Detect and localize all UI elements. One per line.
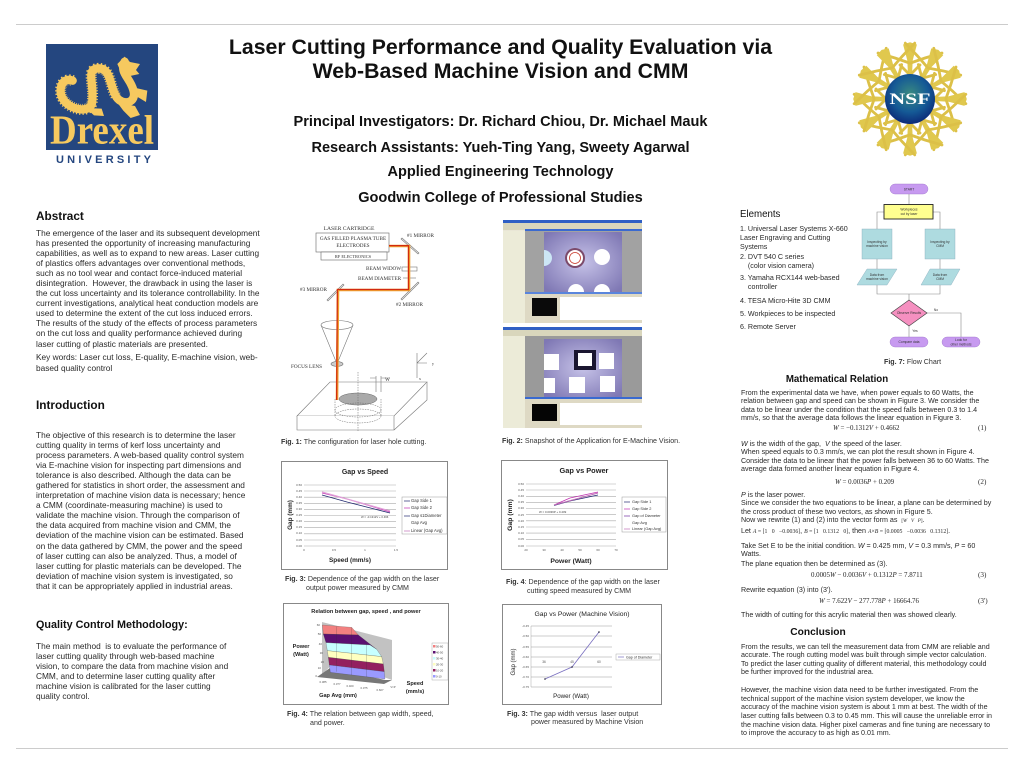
methodology text: CMM, and to determine laser cutting quality after (36, 671, 215, 681)
caption: 3D chart: and power. (310, 719, 345, 727)
math paragraph 1: relation between gap and speed can be shown in Figure 3. We consider the (741, 397, 979, 405)
chart: 3D surface of gap, speed and power: 60 (317, 623, 320, 627)
chart: gap vs power machine vision: -0.55 (522, 645, 529, 649)
chart: gap vs power: 0.20 (518, 519, 524, 523)
caption: 3D chart (287, 710, 434, 727)
math paragraph 4: Watts. (741, 550, 761, 558)
chart: gap vs power: 50 (578, 548, 582, 552)
chart: 3D surface of gap, speed and power (283, 603, 449, 705)
chart: 3D surface of gap, speed and power: 10-20 (436, 668, 444, 672)
chart: gap vs power machine vision: -0.50 (522, 634, 529, 638)
chart: gap vs power machine vision (502, 604, 662, 705)
methodology text: quality control. (36, 691, 90, 701)
conclusion paragraph 2: to improve the accuracy to as high as 0.01 mm. (741, 729, 891, 737)
flow chart: Data from (933, 273, 947, 277)
flow chart: Inspecting by (867, 240, 887, 244)
chart: 3D surface of gap, speed and power: 0-10 (436, 674, 442, 678)
conclusion paragraph 1 (741, 643, 990, 676)
chart: gap vs speed: 0.35 (296, 501, 302, 505)
methodology text: The main method is to evaluate the performance of (36, 641, 226, 651)
chart: gap vs power: 0.35 (518, 500, 524, 504)
chart: gap vs speed: Speed (mm/s) (329, 557, 371, 564)
introduction text: The objective of this research is to determine the laser (36, 430, 236, 440)
chart: gap vs power: Gap vs Power (560, 466, 609, 475)
math paragraph 2: When speed equals to 0.3 mm/s, we can plot the result shown in Figure 4. (741, 448, 975, 456)
bottom screenshot (503, 327, 642, 428)
figure 1: laser configuration diagram: GAS FILLED PLASMA TUBE (320, 236, 386, 242)
chart: gap vs speed: Gap (mm) (287, 500, 294, 530)
flow chart: Yes (912, 329, 918, 333)
abstract text: of plastics offers advantages over conventional methods, (36, 258, 245, 268)
figure 1 caption: Fig. 1: The configuration for laser hole cutting. (281, 438, 426, 446)
flow chart: cut by laser (901, 212, 918, 216)
flow chart: CMM (936, 244, 944, 248)
elements list: 3. Yamaha RCX144 web-based (740, 274, 840, 282)
equation 3 prime: W = 7.622V − 277.778P + 16664.76 (819, 598, 919, 605)
chart: gap vs speed: 0.30 (296, 507, 302, 511)
figure 1: laser configuration diagram: RF ELECTRONICS (335, 254, 372, 259)
elements list (740, 225, 848, 331)
chart: gap vs power: Gap Avg (632, 520, 647, 525)
chart: gap vs power: 0.45 (518, 488, 524, 492)
flow chart: Workpieces (900, 208, 918, 212)
methodology text: vision, to compare the data from machine vision and (36, 661, 228, 671)
text: (3) (978, 571, 986, 579)
key words: based quality control (36, 363, 112, 373)
flow chart: machine vision (866, 244, 888, 248)
chart: gap vs speed: W = -0.1312V + 0.466 (361, 515, 389, 519)
college: Goodwin College of Professional Studies (358, 190, 643, 206)
logo: Drexel University (46, 44, 158, 166)
figure 1: laser configuration diagram: y (432, 361, 434, 366)
chart: gap vs speed: Gap Side 2 (411, 505, 433, 510)
flow chart: CMM (936, 277, 944, 281)
introduction text: cutting quality in terms of kerf loss uncertainty and (36, 440, 220, 450)
chart: gap vs power machine vision: Gap vs Power (Machine Vision) (534, 611, 630, 618)
chart: gap vs power: Gap of Diameter (632, 513, 661, 518)
chart: gap vs power: W = 0.0036P + 0.209 (539, 510, 567, 514)
chart: 3D surface of gap, speed and power: 20 (321, 660, 324, 664)
introduction text: of laser cutting can also be analyzed. Thus, a model of (36, 551, 237, 561)
figure 1: laser configuration diagram: #2 MIRROR (396, 302, 423, 308)
equation 1: W = −0.1312V + 0.4662 (833, 425, 899, 432)
key words (36, 352, 258, 373)
math paragraph 2: W is the width of the gap, V the speed of the laser. (741, 440, 902, 448)
introduction text: that it can be appropriately applied in industrial areas. (36, 581, 233, 591)
conclusion paragraph 2: However, the machine vision data need to be further investigated. From the (741, 686, 978, 694)
math paragraph 2: average data formed another linear equation in Figure 4. (741, 465, 919, 473)
chart: gap vs power: 0.00 (518, 544, 524, 548)
plane equation intro: The plane equation then be determined as (3). (741, 560, 888, 568)
heading: mathematical relation: Mathematical Relation (786, 374, 888, 385)
flow chart: Compare data (899, 340, 920, 344)
chart: 3D surface of gap, speed and power: (Watt) (293, 652, 309, 658)
heading: quality control methodology: Quality Control Methodology: (36, 619, 188, 631)
abstract text: has presented the opportunity of increasing manufacturing (36, 238, 250, 248)
abstract text: used to determine the extent of the cut loss induced errors. (36, 308, 253, 318)
title: Laser Cutting Performance and Quality Evaluation via (229, 35, 772, 59)
heading: elements: Elements (740, 209, 780, 220)
figure 1: laser configuration diagram: FOCUS LENS (291, 364, 322, 370)
figure 1: laser configuration diagram: ELECTRODES (336, 243, 370, 249)
chart: gap vs power: 20 (524, 548, 528, 552)
figure 1: laser configuration diagram: BEAM DIAMETER (358, 276, 402, 282)
figure 2 caption: Fig. 2: Snapshot of the Application for E-Machine Vision. (502, 437, 680, 445)
introduction text: a CMM (coordinate-measuring machine) is used to (36, 500, 223, 510)
conclusion paragraph 2: technical support of the machine vision system developer, we know the (741, 695, 965, 703)
chart: gap vs power machine vision: -0.70 (522, 675, 529, 679)
chart: gap vs power: Power (Watt) (550, 558, 592, 565)
chart: gap vs power: 0.10 (518, 531, 524, 535)
math paragraph 3: Let A = [1 0 −0.0036], B = [1 0.1312 0], then A×B = [0.0005 −0.0036 0.1312]. (741, 527, 950, 535)
chart: gap vs power: Gap Side 2 (632, 506, 651, 511)
chart: gap vs power: Gap (mm) (507, 499, 514, 531)
chart: gap vs speed (281, 461, 448, 570)
text: (2) (978, 478, 986, 486)
abstract text: laser cutting of plastic materials are presented. (36, 339, 208, 349)
text: (1) (978, 424, 986, 432)
introduction text: the data acquired from machine vision and CMM, the (36, 520, 231, 530)
chart: gap vs power: 30 (542, 548, 546, 552)
figure 2: machine vision screenshots (503, 220, 642, 428)
chart: 3D surface of gap, speed and power: Gap Avg (mm) (319, 693, 357, 699)
department: Applied Engineering Technology (387, 164, 614, 180)
caption: figure 4: cutting speed measured by CMM (527, 587, 631, 595)
chart: 3D surface of gap, speed and power: 50 (318, 632, 321, 636)
figure 1: laser configuration diagram: x (419, 376, 421, 381)
chart: 3D surface of gap, speed and power: 30-40 (436, 656, 444, 660)
abstract text: on the cut loss and quality performance achieved during (36, 328, 242, 338)
abstract text: capabilities, as well as to expand to new areas. Laser cutting (36, 248, 259, 258)
introduction text: on the data gathered by CMM, the power and the speed (36, 541, 242, 551)
chart: 3D surface of gap, speed and power: Relation between gap, speed , and power (311, 609, 422, 615)
chart: gap vs power: Gap Side 1 (632, 499, 651, 504)
abstract text: such as no tool wear and contact force-induced material (36, 268, 242, 278)
chart: gap vs power machine vision: -0.65 (522, 665, 529, 669)
introduction text: via E-machine vision for inspecting part dimensions and (36, 460, 241, 470)
chart: gap vs speed: Gap vs Speed (342, 469, 388, 476)
chart: gap vs speed: 0 (303, 548, 305, 552)
chart: gap vs power machine vision: Power (Watt) (553, 693, 589, 700)
math paragraph 3 (741, 491, 992, 535)
introduction text: laser cutting for plastic materials can be developed. The (36, 561, 241, 571)
conclusion paragraph 1: be further improved for the industrial area. (741, 668, 874, 676)
chart: 3D surface of gap, speed and power: Power (293, 644, 310, 650)
chart: gap vs power machine vision: 45 (570, 660, 574, 664)
chart: gap vs power: 70 (614, 548, 618, 552)
conclusion paragraph 2 (741, 686, 992, 737)
math paragraph 2 (741, 440, 989, 473)
introduction text: deviation of machine vision system is investigated, so (36, 571, 233, 581)
text: (3') (978, 597, 988, 605)
abstract text: The emergence of the laser and its subsequent development (36, 228, 260, 238)
chart: gap vs power: 0.15 (518, 525, 524, 529)
math paragraph 1: From the experimental data we have, when power equals to 60 Watts, the (741, 389, 974, 397)
chart: gap vs speed: 0.5 (332, 548, 336, 552)
introduction text: tolerance is also described. Although the data can be (36, 470, 231, 480)
top screenshot (503, 220, 642, 323)
chart: 3D surface of gap, speed and power: Speed (407, 681, 424, 687)
flow chart: START (904, 188, 914, 192)
key words: Key words: Laser cut loss, E-quality, E-machine vision, web- (36, 352, 258, 362)
figure 1: laser configuration diagram: BEAM WIDOW (366, 266, 401, 272)
introduction text: process parameters. A web-based quality control system (36, 450, 244, 460)
methodology text (36, 641, 228, 701)
math paragraph 1: data to be linear under the condition that the speed falls between 0.3 to 1.4 (741, 406, 977, 414)
chart: gap vs speed: Gap s1Diameter (411, 513, 442, 518)
chart: gap vs speed: Gap Side 1 (411, 498, 433, 503)
chart: gap vs power machine vision: Gap (mm) (511, 648, 517, 676)
caption: figure 3: output power measured by CMM (306, 584, 409, 592)
abstract text: disintegration. However, the drawback in using the laser is (36, 278, 252, 288)
math paragraph 1: mm/s, so that the average data follows the linear equation in Figure 3. (741, 414, 961, 422)
flow chart caption: Fig. 7: Flow Chart (884, 358, 941, 366)
flow chart: Look for (955, 338, 968, 342)
elements list: (color vision camera) (748, 262, 814, 270)
chart: gap vs speed: Gap Avg (411, 520, 428, 525)
elements list: 6. Remote Server (740, 323, 796, 331)
chart: gap vs power machine vision: -0.75 (522, 685, 529, 689)
math paragraph 4 (741, 542, 976, 558)
flow chart: Data from (870, 273, 884, 277)
math paragraph 3: P is the laser power. (741, 491, 805, 499)
heading: abstract: Abstract (36, 209, 84, 223)
abstract text (36, 228, 260, 349)
caption: figure 4 (506, 578, 660, 595)
elements list: 5. Workpieces to be inspected (740, 310, 835, 318)
chart: gap vs speed: 0.00 (296, 544, 302, 548)
rewrite line: Rewrite equation (3) into (3'). (741, 586, 833, 594)
figure 1: laser configuration diagram: #1 MIRROR (407, 233, 434, 239)
introduction text: gathered for statistics in short order, the assessment and (36, 480, 245, 490)
abstract text: The results of the study of the effects of process parameters (36, 318, 257, 328)
chart: gap vs power: 0.40 (518, 494, 524, 498)
elements list: controller (748, 283, 777, 291)
math paragraph 1 (741, 389, 979, 422)
equation 3: 0.0005W − 0.0036V + 0.1312P = 7.8711 (811, 572, 923, 579)
chart: gap vs power: 40 (560, 548, 564, 552)
caption: 3D chart: Fig. 4: The relation between gap width, speed, (287, 710, 434, 718)
elements list: Laser Engraving and Cutting (740, 234, 830, 242)
conclusion paragraph 2: accuracy of the machine vision system is about 1 mm at best. The width of the (741, 703, 988, 711)
conclusion paragraph 2: laser cutting falls between 0.3 to 0.45 mm. This will cause the unreliable error in (741, 712, 992, 720)
conclusion paragraph 1: From the results, we can tell the measurement data from CMM are reliable and (741, 643, 990, 651)
chart: gap vs power machine vision: 60 (597, 660, 601, 664)
chart: gap vs power machine vision: Gap of Diameter (626, 656, 653, 660)
introduction text: interpretation of machine vision data is necessary; hence (36, 490, 245, 500)
elements list: 4. TESA Micro-Hite 3D CMM (740, 297, 831, 305)
chart: gap vs speed: 0.40 (296, 495, 302, 499)
math paragraph 2: Consider the data to be linear that the power falls between 36 to 60 Watts. The (741, 457, 989, 465)
methodology text: machine vision is calibrated for the laser cutting (36, 681, 211, 691)
flow chart: Inspecting by (930, 240, 950, 244)
chart: gap vs power: 0.50 (518, 482, 524, 486)
chart: gap vs power: 0.30 (518, 506, 524, 510)
math paragraph 3: Since we consider the two equations to be linear, a plane can be determined by (741, 499, 991, 507)
methodology text: laser cutting quality through web-based machine (36, 651, 214, 661)
chart: 3D surface of gap, speed and power: 0.385 (320, 680, 327, 684)
chart: 3D surface of gap, speed and power: 0.400 (346, 684, 354, 688)
flow chart: other methods (950, 342, 972, 346)
conclusion paragraph 2: the machine vision data. Higher pixel cameras and fine tuning are necessary to (741, 720, 990, 728)
caption: figure 3 (285, 575, 440, 592)
chart: gap vs speed: 0.25 (296, 513, 302, 517)
chart: gap vs speed: 0.10 (296, 531, 302, 535)
chart: gap vs power machine vision: -0.60 (522, 655, 529, 659)
flow chart (856, 184, 980, 348)
heading: conclusion: Conclusion (790, 627, 846, 638)
figure 1: laser configuration diagram: LASER CARTRIDGE (324, 226, 375, 232)
chart: gap vs power machine vision: -0.45 (522, 624, 529, 628)
investigators: Principal Investigators: Dr. Richard Chiou, Dr. Michael Mauk (294, 114, 707, 130)
chart: 3D surface of gap, speed and power: 50-60 (436, 644, 444, 648)
heading: introduction: Introduction (36, 398, 105, 412)
research assistants: Research Assistants: Yueh-Ting Yang, Sweety Agarwal (311, 140, 690, 156)
elements list: 2. DVT 540 C series (740, 253, 804, 261)
conclusion paragraph 1: To predict the laser cutting quality of different material, this methodology could (741, 660, 986, 668)
chart: gap vs power (501, 460, 668, 570)
chart: gap vs power: 0.05 (518, 537, 524, 541)
chart: gap vs power: 0.25 (518, 513, 524, 517)
chart: gap vs speed: 0.50 (296, 483, 302, 487)
logo: NSF (852, 42, 968, 156)
chart: gap vs speed: Linear (Gap Avg) (411, 528, 443, 533)
caption: machine vision chart: power measured by Machine Vision (531, 718, 643, 726)
figure 1: laser configuration diagram (291, 226, 434, 431)
chart: gap vs power: 60 (596, 548, 600, 552)
math paragraph 4: Take Set E to be the initial condition. W = 0.425 mm, V = 0.3 mm/s, P = 60 (741, 542, 975, 550)
introduction text (36, 430, 245, 591)
chart: gap vs power machine vision: 36 (542, 660, 546, 664)
math paragraph 3: Now we rewrite (1) and (2) into the vector form as [W V P]. (741, 516, 924, 524)
chart: 3D surface of gap, speed and power: 0.607 (376, 688, 384, 692)
logo: Drexel University: UNIVERSITY (56, 154, 152, 166)
elements list: Systems (740, 243, 767, 251)
flow chart: No (934, 308, 938, 312)
equation 2: W = 0.0036P + 0.209 (835, 479, 894, 486)
flow chart: Observe Results (897, 311, 922, 315)
introduction text: deviation of the machine vision can be estimated. Based (36, 530, 243, 540)
caption: machine vision chart (507, 710, 643, 726)
chart: 3D surface of gap, speed and power: 0 (315, 674, 317, 678)
chart: 3D surface of gap, speed and power: 40-50 (436, 650, 444, 654)
chart: 3D surface of gap, speed and power: 40 (319, 642, 322, 646)
math paragraph 3: the cross product of these two vectors, as shown in Figure 5. (741, 508, 933, 516)
figure 1: laser configuration diagram: #3 MIRROR (300, 287, 327, 293)
introduction text: validate the machine vision. Through the comparison of (36, 510, 240, 520)
chart: 3D surface of gap, speed and power: V=P (390, 685, 396, 689)
caption: machine vision chart: Fig. 3: The gap width versus laser output (507, 710, 638, 718)
chart: gap vs speed: 0.05 (296, 538, 302, 542)
chart: gap vs speed: 0.45 (296, 489, 302, 493)
abstract text: current investigations, analytical heat conduction models are (36, 298, 258, 308)
chart: 3D surface of gap, speed and power: 0.377 (334, 682, 341, 686)
title (229, 35, 772, 83)
chart: 3D surface of gap, speed and power: 10 (318, 666, 321, 670)
chart: gap vs power: Linear (Gap Avg) (632, 526, 662, 531)
elements list: 1. Universal Laser Systems X-660 (740, 225, 848, 233)
chart: gap vs speed: 0.15 (296, 525, 302, 529)
chart: 3D surface of gap, speed and power: (mm/s) (406, 689, 424, 695)
conclusion paragraph 1: accurate. The rough cutting model was built through simple vector calculation. (741, 651, 986, 659)
chart: 3D surface of gap, speed and power: 20-30 (436, 662, 444, 666)
flow chart: machine vision (866, 277, 888, 281)
caption: figure 3: Fig. 3: Dependence of the gap width on the laser (285, 575, 439, 583)
caption: figure 4: Fig. 4: Dependence of the gap width on the laser (506, 578, 660, 586)
chart: gap vs speed: 0.20 (296, 519, 302, 523)
figure 1: laser configuration diagram: W (385, 377, 390, 383)
chart: gap vs speed: 1.5 (394, 548, 398, 552)
chart: 3D surface of gap, speed and power: 30 (320, 651, 323, 655)
closing line: The width of cutting for this acrylic material then was showed clearly. (741, 611, 957, 619)
chart: gap vs speed: 1 (364, 548, 366, 552)
title: Web-Based Machine Vision and CMM (313, 59, 688, 83)
chart: 3D surface of gap, speed and power: 0.375 (360, 686, 368, 690)
abstract text: the cut loss uncertainty and its tolerance controllability. In the (36, 288, 259, 298)
logo: NSF: NSF (890, 91, 931, 108)
